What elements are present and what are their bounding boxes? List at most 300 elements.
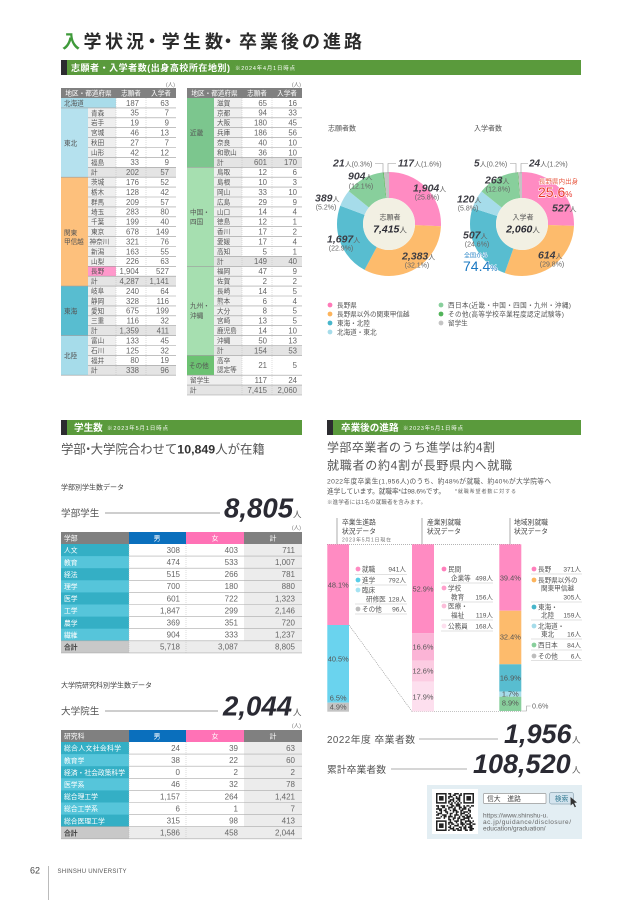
table: graduates: 24 (171, 744, 181, 753)
table: applicants right: 601 (254, 158, 267, 167)
stacked bar: career paths (327, 544, 349, 712)
table: applicants right: 計 (217, 346, 224, 355)
graduation body text (327, 476, 551, 506)
table: undergraduates: 女 (212, 534, 219, 543)
url: ac.jp/guidance/disclosure/ (483, 819, 571, 826)
table: graduates: 2 (234, 768, 239, 777)
table: applicants right (187, 82, 302, 395)
table: applicants right: その他 (189, 361, 209, 370)
section bar: students: 学生数 (74, 422, 103, 434)
table: undergraduates: 515 (167, 570, 181, 579)
bar column heading: by industry: 状況データ (427, 526, 461, 536)
table: applicants left: 57 (160, 198, 169, 207)
table: undergraduates: 266 (225, 570, 239, 579)
sub-heading: undergraduate data: 学部別学生数データ (61, 482, 124, 492)
table: applicants right: 広島 (217, 197, 231, 206)
url (483, 812, 571, 833)
legend: by region: 西日本 (538, 640, 558, 649)
total: 2022 graduates (327, 719, 581, 749)
table: applicants right: 10 (288, 326, 298, 336)
table: applicants left: 42 (160, 188, 169, 197)
table: graduates: 22 (229, 756, 239, 765)
table: applicants left: 675 (126, 307, 140, 316)
legend: by industry: 福祉 (451, 610, 465, 619)
table: applicants right: 6 (293, 168, 297, 177)
table: applicants left: 富山 (91, 336, 104, 345)
table: applicants right: 熊本 (217, 296, 231, 305)
table: applicants right: 53 (288, 346, 297, 355)
graduation body text: ※進学者には1名の就職者を含みます。 (327, 498, 426, 506)
table: applicants left: 三重 (91, 317, 105, 325)
table: applicants left: 新潟 (91, 247, 105, 256)
stacked bar: by industry: 17.9% (413, 693, 434, 702)
stacked bar: by region: 8.9% (502, 699, 519, 708)
legend: by region: 16人 (567, 631, 581, 638)
pie chart: applicants: 志願者 (380, 212, 400, 222)
undergraduate total: 学部学生 (61, 508, 100, 520)
connector dotted lines (327, 544, 521, 712)
table: undergraduates: 711 (282, 546, 296, 555)
table: applicants right: 4 (293, 208, 298, 217)
stacked bar: by region: 16.9% (500, 674, 521, 683)
bar column heading: career paths (337, 518, 391, 544)
table: applicants left: 45 (160, 336, 170, 345)
stacked bar: by industry: 16.6% (413, 643, 434, 652)
table: applicants left: 入学者 (151, 88, 171, 97)
table: applicants left: 19 (160, 356, 169, 365)
table: graduates: 1,157 (160, 792, 181, 801)
table: graduates: 経済・社会政策科学 (64, 768, 125, 777)
table: applicants left: 42 (130, 148, 139, 157)
table: graduates: 458 (225, 829, 239, 838)
pie chart: applicants: (12.1%) (349, 184, 373, 190)
table: applicants right: 5 (263, 247, 268, 256)
table: applicants right: 和歌山 (217, 148, 237, 157)
pie chart: applicants: 117人(1.6%) (398, 158, 442, 170)
table: applicants left: (人) (166, 82, 175, 88)
stacked bar: by industry: 52.9% (413, 585, 434, 594)
table: applicants left: 山梨 (91, 257, 105, 266)
table: undergraduates: 333 (225, 631, 239, 640)
table: graduates: 2,044 (275, 829, 296, 838)
legend: career paths: 96人 (392, 606, 406, 613)
bar column heading: by industry: 産業別就職 (427, 518, 461, 526)
total: cumulative graduates: 累計卒業者数 (327, 763, 386, 776)
table: applicants left: 東北 (64, 139, 78, 148)
table: graduates (61, 724, 302, 839)
table: applicants right: 計 (217, 158, 224, 167)
table: applicants right: 2 (263, 277, 267, 286)
table: applicants left: 岐阜 (91, 286, 105, 296)
table: undergraduates: 計 (270, 534, 277, 543)
table: graduates: 2 (291, 768, 296, 777)
table: graduates: 総合人文社会科学 (64, 744, 121, 753)
pie legend: 留学生 (448, 318, 468, 327)
QR code (432, 789, 478, 834)
table: applicants left: 321 (126, 237, 139, 246)
table: applicants right: 5 (293, 287, 298, 296)
table: graduates: 合計 (64, 828, 78, 837)
table: applicants right: 21 (258, 361, 267, 370)
graduate total: 大学院生 (61, 706, 100, 718)
table: applicants left: 176 (126, 178, 139, 187)
table: applicants left: 226 (126, 257, 139, 266)
sub-heading: graduate data: 大学院研究科別学生数データ (61, 680, 152, 690)
legend: career paths: その他 (362, 604, 382, 613)
pie chart: applicants: (25.8%) (415, 194, 439, 202)
table: applicants left: 埼玉 (91, 207, 105, 216)
table: applicants right: 計 (217, 257, 224, 266)
table: applicants left: 202 (126, 168, 139, 177)
table: graduates: 総合医理工学 (64, 816, 105, 825)
legend: by region (531, 565, 582, 660)
table: applicants right: 入学者 (277, 88, 297, 97)
table: applicants left (61, 82, 176, 375)
table: applicants right: 愛媛 (217, 237, 231, 246)
table: applicants left: 4,287 (119, 277, 139, 286)
table: applicants right: 24 (288, 376, 298, 385)
table: graduates: 1,421 (275, 792, 296, 801)
legend: by industry: 学校 (448, 583, 462, 592)
section bar: students: ※2023年5月1日時点 (107, 424, 169, 432)
title: 学状況・学生数・卒業後の進路 (84, 31, 362, 52)
stacked bar: career paths: 6.5% (330, 694, 347, 703)
table: applicants left: 328 (126, 297, 139, 306)
table: undergraduates: 601 (167, 594, 181, 603)
table: applicants right: 10 (288, 148, 298, 157)
total: cumulative graduates: 人 (572, 765, 581, 775)
table: applicants left: 長野 (91, 268, 105, 276)
section bar: after graduation: 卒業後の進路 (341, 422, 399, 434)
students headline: 学部・大学院合わせて10,849人が在籍 (61, 442, 265, 456)
table: applicants right: 56 (288, 128, 297, 138)
table: applicants left: 山形 (91, 149, 105, 157)
table: applicants left: 149 (156, 228, 169, 236)
table: applicants left: 石川 (91, 347, 104, 355)
table: applicants right: 1 (293, 247, 297, 256)
table: applicants right: 四国 (190, 218, 204, 226)
table: applicants right: 40 (288, 257, 298, 266)
footer: SHINSHU UNIVERSITY (58, 869, 126, 875)
legend: by industry: 公務員 (448, 621, 468, 630)
pie legend: 北海道・東北 (337, 327, 377, 336)
table: undergraduates: 1,847 (160, 606, 181, 615)
table: applicants right: 33 (258, 188, 267, 197)
table: applicants left: 千葉 (91, 217, 105, 226)
table: graduates: 78 (286, 780, 296, 789)
legend: by region: 長野県以外の (538, 575, 578, 584)
table: applicants left: 80 (160, 208, 170, 217)
table: graduates: 39 (229, 744, 239, 753)
table: applicants left: 静岡 (91, 296, 105, 305)
table: graduates: 38 (171, 756, 181, 765)
legend: by region: 北海道・ (538, 621, 564, 630)
section bar: after graduation: ※2023年5月1日時点 (403, 424, 464, 432)
legend: career paths (355, 564, 407, 614)
legend: career paths: 792人 (388, 577, 406, 584)
total: 2022 graduates: 2022年度 卒業者数 (327, 733, 415, 746)
table: applicants right: 36 (258, 148, 267, 157)
table: applicants left: 19 (130, 119, 139, 128)
legend: by region: 371人 (563, 566, 581, 573)
table: applicants left: 東海 (64, 306, 78, 316)
pie chart: enrolled: 24人(1.2%) (528, 158, 568, 170)
legend: by region: 東海・ (538, 602, 558, 611)
pie chart: applicants: 21人(0.3%) (332, 158, 372, 170)
table: applicants left: 計 (91, 168, 98, 177)
graduation headline: 就職者の約4割が長野県内へ就職 (327, 458, 512, 472)
table: applicants right: 13 (288, 336, 297, 345)
footer (30, 866, 126, 900)
table: applicants left: 秋田 (91, 138, 104, 147)
undergraduate total: 8,805 (224, 492, 294, 524)
table: applicants left: 116 (127, 317, 139, 326)
table: undergraduates: 880 (282, 582, 296, 591)
table: applicants left: 宮城 (91, 128, 105, 137)
stacked bar: career paths: 48.1% (328, 581, 349, 590)
table: graduates: 1,586 (160, 829, 181, 838)
table: applicants left: 128 (126, 188, 139, 197)
table: graduates: 413 (282, 816, 296, 826)
table: applicants left: 1,904 (119, 267, 140, 276)
pie chart: applicants: (22.9%) (329, 246, 353, 252)
legend: by industry: 156人 (475, 594, 493, 601)
table: applicants right: 留学生 (190, 376, 210, 385)
table: applicants right: 4 (293, 237, 298, 246)
table: applicants right: 1 (293, 218, 297, 227)
table: undergraduates: 403 (225, 546, 239, 555)
pie legend: 長野県 (337, 301, 357, 309)
table: applicants left: 神奈川 (90, 237, 109, 246)
table: applicants left: 愛知 (91, 306, 104, 315)
table: applicants right: 鹿児島 (217, 326, 237, 335)
table: applicants left: 32 (160, 346, 169, 355)
search box: 信大 進路 (487, 794, 521, 803)
stacked bar: by industry: 12.6% (413, 667, 434, 676)
table: applicants left: 64 (160, 287, 170, 296)
table: applicants left: 群馬 (91, 197, 105, 206)
pie chart: enrolled: 長野県内出身 (539, 176, 579, 186)
table: applicants left: 27 (130, 138, 139, 147)
table: applicants right: 中国・ (190, 208, 210, 216)
pie chart: enrolled: 74.4% (463, 258, 497, 274)
table: applicants left: 55 (160, 247, 170, 256)
pie chart: applicants: 389人 (315, 192, 340, 204)
table: undergraduates: 合計 (64, 642, 78, 652)
url: https://www.shinshu-u. (483, 812, 548, 819)
pie chart: applicants: 1,697人 (327, 234, 360, 246)
pie chart: enrolled: (5.8%) (458, 206, 478, 212)
graduation headline: 学部卒業者のうち進学は約4割 (327, 440, 495, 454)
total: 2022 graduates: 人 (572, 735, 581, 745)
graduate total (61, 690, 302, 722)
table: undergraduates (61, 526, 302, 653)
bar column heading: career paths: 卒業生進路 (342, 518, 376, 526)
table: applicants left: 計 (91, 277, 98, 286)
pie legend: 長野県以外の関東甲信越 (337, 309, 410, 318)
table: graduates: 1 (234, 804, 239, 813)
section bar: after graduation (327, 420, 581, 435)
table: applicants right: 12 (258, 218, 267, 227)
table: applicants left: 527 (156, 267, 169, 276)
legend: by industry: 168人 (475, 623, 493, 630)
table: applicants left: 187 (126, 99, 139, 108)
table: applicants right: 10 (258, 178, 268, 187)
legend: by industry: 民間 (448, 565, 462, 573)
section bar: applicants: 志願者・入学者数(出身高校所在地別) (71, 62, 230, 73)
table: applicants right: 186 (254, 128, 267, 138)
table: applicants left: 33 (130, 158, 139, 167)
table: applicants left: 52 (160, 178, 169, 187)
table: graduates: 32 (229, 780, 239, 789)
table: graduates: 研究科 (64, 732, 85, 741)
table: applicants left: 35 (130, 109, 140, 118)
search box (484, 794, 546, 804)
pie legend (328, 300, 571, 336)
table: undergraduates: 1,007 (275, 558, 296, 567)
table: applicants right: 4 (293, 297, 298, 306)
table: applicants left: 411 (157, 326, 169, 336)
table: applicants right: 2,060 (277, 386, 298, 395)
table: applicants right: 65 (258, 99, 268, 108)
table: undergraduates: 男 (154, 535, 160, 543)
legend: by region: 84人 (567, 642, 581, 649)
pie chart: applicants: (5.2%) (316, 204, 336, 212)
pie chart: enrolled: 120人 (457, 194, 482, 206)
table: graduates: 計 (270, 732, 277, 741)
legend: by industry (441, 565, 493, 631)
table: applicants left: 678 (126, 228, 139, 236)
table: applicants left: 計 (91, 366, 98, 375)
table: applicants right: 兵庫 (217, 128, 231, 137)
table: undergraduates: 1,323 (275, 594, 296, 603)
table: applicants left: 1,359 (119, 326, 139, 336)
table: applicants left: 福井 (91, 356, 105, 365)
table: graduates: 98 (229, 816, 239, 826)
table: undergraduates: 農学 (64, 618, 78, 627)
table: applicants right: 香川 (217, 227, 230, 236)
table: undergraduates: 理学 (64, 582, 78, 591)
graduation body text: 2022年度卒業生(1,956人)のうち、約48%が就職、約40%が大学院等へ (327, 476, 551, 486)
undergraduate total (61, 492, 302, 524)
bar column heading: career paths: 状況データ (342, 526, 376, 536)
bar column heading: by region (510, 518, 548, 544)
table: applicants right: 京都 (217, 109, 231, 117)
table: graduates: 男 (154, 733, 160, 741)
table: applicants left: 地区・都道府県 (65, 88, 112, 97)
table: applicants right: 6 (263, 297, 267, 306)
legend: by region: 東北 (541, 629, 555, 638)
table: applicants left: 青森 (91, 108, 105, 117)
table: applicants right: 3 (293, 178, 297, 187)
pie chart: applicants: 2,383人 (401, 250, 435, 262)
table: applicants left: 32 (160, 317, 169, 326)
table: undergraduates: 533 (225, 558, 239, 567)
table: applicants left: 46 (130, 128, 139, 138)
table: applicants left: 東京 (91, 227, 105, 236)
heading: applicants pie: 志願者数 (328, 124, 356, 132)
table: applicants left: 茨城 (91, 178, 105, 187)
stacked bar: by region: 1.7% (502, 690, 519, 698)
table: undergraduates: 繊維 (64, 630, 78, 639)
table: applicants right: 長崎 (217, 286, 231, 296)
table: applicants right: (人) (292, 82, 301, 88)
table: graduates: 女 (212, 732, 219, 741)
graduation body text: 進学しています。就職率*は98.6%です。 (327, 486, 445, 496)
table: graduates: 7 (291, 804, 296, 813)
pie chart: enrolled: (29.8%) (540, 262, 564, 268)
table: applicants right: 8 (263, 307, 267, 316)
legend: career paths: 臨床 (362, 585, 376, 594)
table: graduates: 315 (167, 816, 181, 826)
title: 入 (62, 32, 80, 52)
table: applicants right: 佐賀 (217, 277, 231, 286)
table: graduates: 264 (225, 792, 239, 801)
bar column heading: by region: 状況データ (514, 526, 548, 536)
pie chart: applicants: 7,415人 (373, 224, 407, 236)
table: applicants right: 高知 (217, 247, 230, 256)
table: undergraduates: 3,087 (218, 643, 239, 652)
table: applicants left: 9 (165, 158, 169, 167)
pie chart: enrolled (457, 158, 579, 274)
pie chart: applicants: 1,904人 (413, 182, 446, 194)
legend: by region: その他 (538, 651, 558, 660)
table: applicants right: 2 (293, 277, 297, 286)
table: applicants left: 96 (160, 366, 169, 375)
table: applicants left: 13 (160, 128, 169, 138)
table: applicants right: 16 (288, 99, 297, 108)
table: applicants right: 94 (258, 109, 268, 118)
table: graduates: 総合工学系 (64, 804, 98, 813)
table: applicants right: 5 (293, 307, 298, 316)
graduate total: 2,044 (222, 690, 292, 722)
table: applicants left: 7 (165, 138, 169, 147)
table: applicants right: 13 (258, 317, 267, 326)
table: applicants right: 滋賀 (217, 98, 231, 107)
table: applicants right: 10 (288, 138, 298, 147)
table: applicants left: 志願者 (121, 88, 141, 97)
table: graduates: (人) (292, 724, 301, 730)
legend: by region: 長野 (538, 565, 552, 573)
stacked bar: career paths: 40.5% (328, 655, 349, 664)
table: applicants right: 徳島 (217, 217, 231, 226)
table: applicants right: 沖縄 (217, 336, 231, 345)
table: applicants left: 80 (130, 356, 140, 365)
total: 2022 graduates: 1,956 (504, 719, 573, 749)
table: applicants right: 近畿 (190, 128, 204, 137)
table: applicants right: 福岡 (217, 267, 231, 276)
table: applicants right: 47 (258, 267, 267, 276)
table: applicants right: 9 (293, 267, 297, 276)
table: undergraduates: 720 (282, 618, 296, 628)
table: applicants left: 240 (126, 287, 140, 296)
table: applicants left: 計 (91, 326, 98, 335)
table: applicants left: 199 (126, 218, 139, 227)
table: applicants left: 関東 (64, 228, 78, 237)
graduate total: 人 (293, 708, 302, 718)
pie chart: enrolled: 入学者 (512, 212, 534, 222)
table: applicants right: 2 (293, 228, 297, 236)
bar column heading: by industry (422, 518, 461, 544)
pie chart: enrolled: 2,060人 (505, 224, 540, 236)
table: applicants left: 338 (126, 366, 139, 375)
table: applicants right: 170 (284, 158, 298, 167)
legend: by region: 6人 (571, 653, 581, 660)
legend: by region: 関東甲信越 (541, 583, 574, 592)
table: applicants left: 福島 (91, 158, 105, 167)
icon: cursor (570, 797, 577, 807)
table: applicants right: 奈良 (217, 138, 231, 147)
